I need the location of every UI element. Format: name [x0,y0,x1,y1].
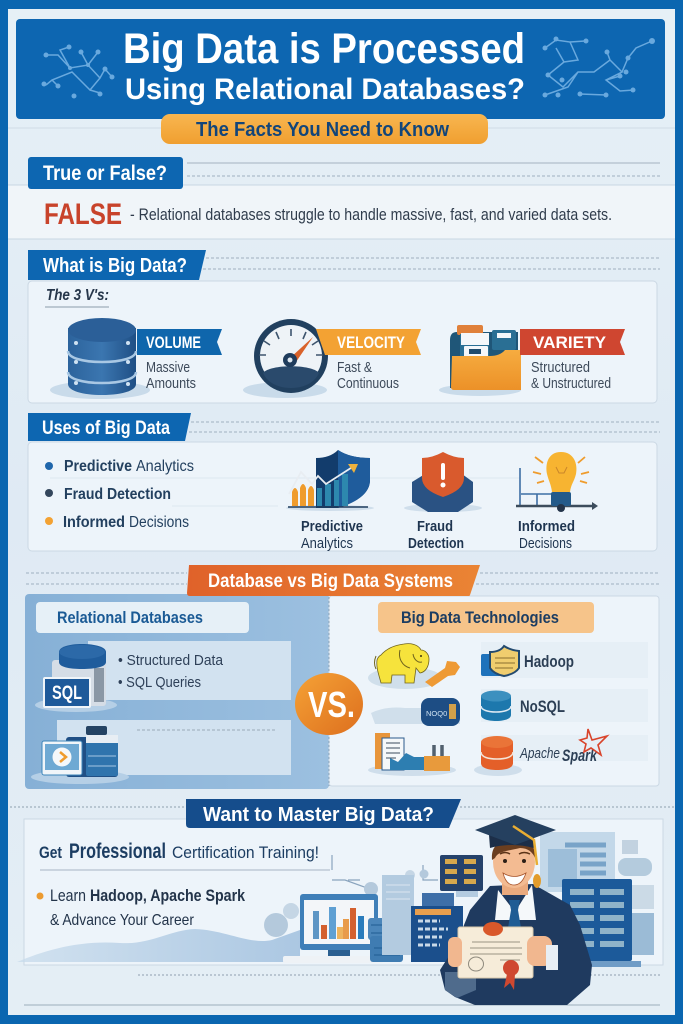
icon: variety folder [439,325,521,396]
cta line [39,840,319,863]
list: uses: Informed [63,514,125,531]
icon: right molecule network [542,36,655,98]
text: massive amounts [146,360,196,392]
card: structured data list [88,641,291,700]
heading: want to master big data: Want to Master Big Data? [203,804,434,826]
text: structured and unstructured [531,360,611,392]
label: predictive analytics: Predictive [301,518,363,535]
text: massive amounts: Massive [146,360,190,376]
text: nosql: NoSQL [520,697,565,716]
answer band [8,185,675,239]
bullet: learn hadoop [36,886,245,929]
label: big data technologies [378,602,594,633]
text: fast and continuous: Fast & [337,360,372,376]
section lines: true or false [187,162,660,164]
heading: what is big data: What is Big Data? [43,255,187,277]
list: uses: Analytics [136,458,194,475]
face [492,836,536,895]
list: uses [45,458,194,531]
icon: nosql device [371,698,460,726]
blue server rack [555,879,654,967]
icon: sql database [35,644,117,712]
text: fast and continuous [337,360,399,392]
small dark panel [440,855,483,891]
gown [440,884,592,1005]
label: fraud detection: Fraud [417,518,453,535]
heading: database vs big data systems: Database vs Big Data Systems [208,571,453,592]
ribbon: volume: VOLUME [146,333,201,352]
subtitle pill [161,114,488,144]
label: relational databases [36,602,249,633]
text: massive amounts: Amounts [146,376,196,392]
false word: FALSE [44,198,122,231]
icon: nosql cylinder [481,690,511,721]
monitor with bar chart [283,894,383,963]
panel: want to master big data [17,819,663,967]
icon: hadoop shield [481,646,519,676]
ribbon: velocity: VELOCITY [337,333,406,352]
panel: big data technologies [329,596,659,786]
label: relational databases: Relational Databases [57,608,203,627]
panel: relational databases [25,594,329,789]
shirt and tie [495,885,536,928]
heading: true or false [28,157,183,189]
card: structured data list: • Structured Data [118,652,224,669]
panel: what is big data [28,281,657,403]
card: empty second card [57,720,291,775]
cta line: Certification Training! [172,843,319,862]
list: uses: Decisions [129,514,189,531]
icon: sql database: SQL [52,683,82,704]
tall background document [540,832,652,892]
text: fast and continuous: Continuous [337,376,399,392]
text: hadoop: Hadoop [524,652,574,671]
ribbon: velocity [316,329,421,355]
ribbon: variety [520,329,625,355]
bullet: learn hadoop: & Advance Your Career [50,912,195,929]
list: uses: Predictive [64,458,132,475]
ribbon: volume [137,329,222,355]
heading: uses of big data: Uses of Big Data [42,417,170,439]
mortarboard [475,815,556,888]
graduate illustration [440,815,592,1005]
text: structured and unstructured: Structured [531,360,590,376]
title line 2: Using Relational Databases? [125,73,525,106]
small server stack [368,918,403,962]
card: structured data list: • SQL Queries [118,674,201,691]
text: structured and unstructured: & Unstructured [531,376,611,392]
icon: velocity gauge [243,319,328,398]
label: fraud detection: Detection [408,535,464,552]
icon: factory and documents [368,733,456,776]
label: predictive analytics: Analytics [301,535,353,552]
title line 1: Big Data is Processed [123,25,525,73]
icon: informed decisions bulb [516,452,598,512]
label: predictive analytics [301,518,363,552]
icon: spark database [474,736,522,776]
heading: what is big data [28,250,206,280]
icon: hadoop elephant and wrench [368,644,460,689]
header banner [16,19,665,119]
icon: monitor and server [31,726,129,784]
hands and diploma [448,922,558,990]
logo: apache spark [519,729,607,765]
row backgrounds [481,642,648,761]
vs badge: VS. [308,684,355,725]
heading: database vs big data systems [187,565,480,596]
label: informed decisions [518,518,575,552]
label: big data technologies: Big Data Technologies [401,608,559,627]
icon: left molecule network [42,44,114,98]
heading: true or false: True or False? [43,162,167,185]
cta line: Professional [69,840,166,863]
label: informed decisions: Informed [518,518,575,535]
heading: want to master big data [186,799,461,828]
panel: uses of big data [28,442,657,552]
ribbon: variety: VARIETY [533,333,607,352]
subtitle pill: The Facts You Need to Know [196,119,449,141]
vs badge [295,673,363,735]
cta line: Get [39,843,62,862]
bullet: learn hadoop: Hadoop, Apache Spark [90,886,245,905]
decorative hills [17,929,300,962]
the 3 v's label: The 3 V's: [46,287,109,304]
blue dashboard screen [411,906,463,962]
logo: apache spark: Spark [562,746,598,765]
list: uses: Fraud Detection [64,486,171,503]
circles and connectors [264,855,440,937]
icon: database volume [50,318,150,399]
label: informed decisions: Decisions [519,535,572,552]
background building [382,875,478,955]
logo: apache spark: Apache [519,746,560,762]
label: fraud detection [408,518,464,552]
icon: predictive analytics shield and chart [286,450,374,511]
icon: nosql device: NOQ0 [426,709,447,718]
icon: fraud detection shield [404,452,482,512]
bullet: learn hadoop: Learn [50,886,86,905]
heading: uses of big data [28,413,191,441]
divider lines beside subtitle [8,127,675,129]
false explanation: - Relational databases struggle to handle massive, fast, and varied data sets. [130,206,612,224]
